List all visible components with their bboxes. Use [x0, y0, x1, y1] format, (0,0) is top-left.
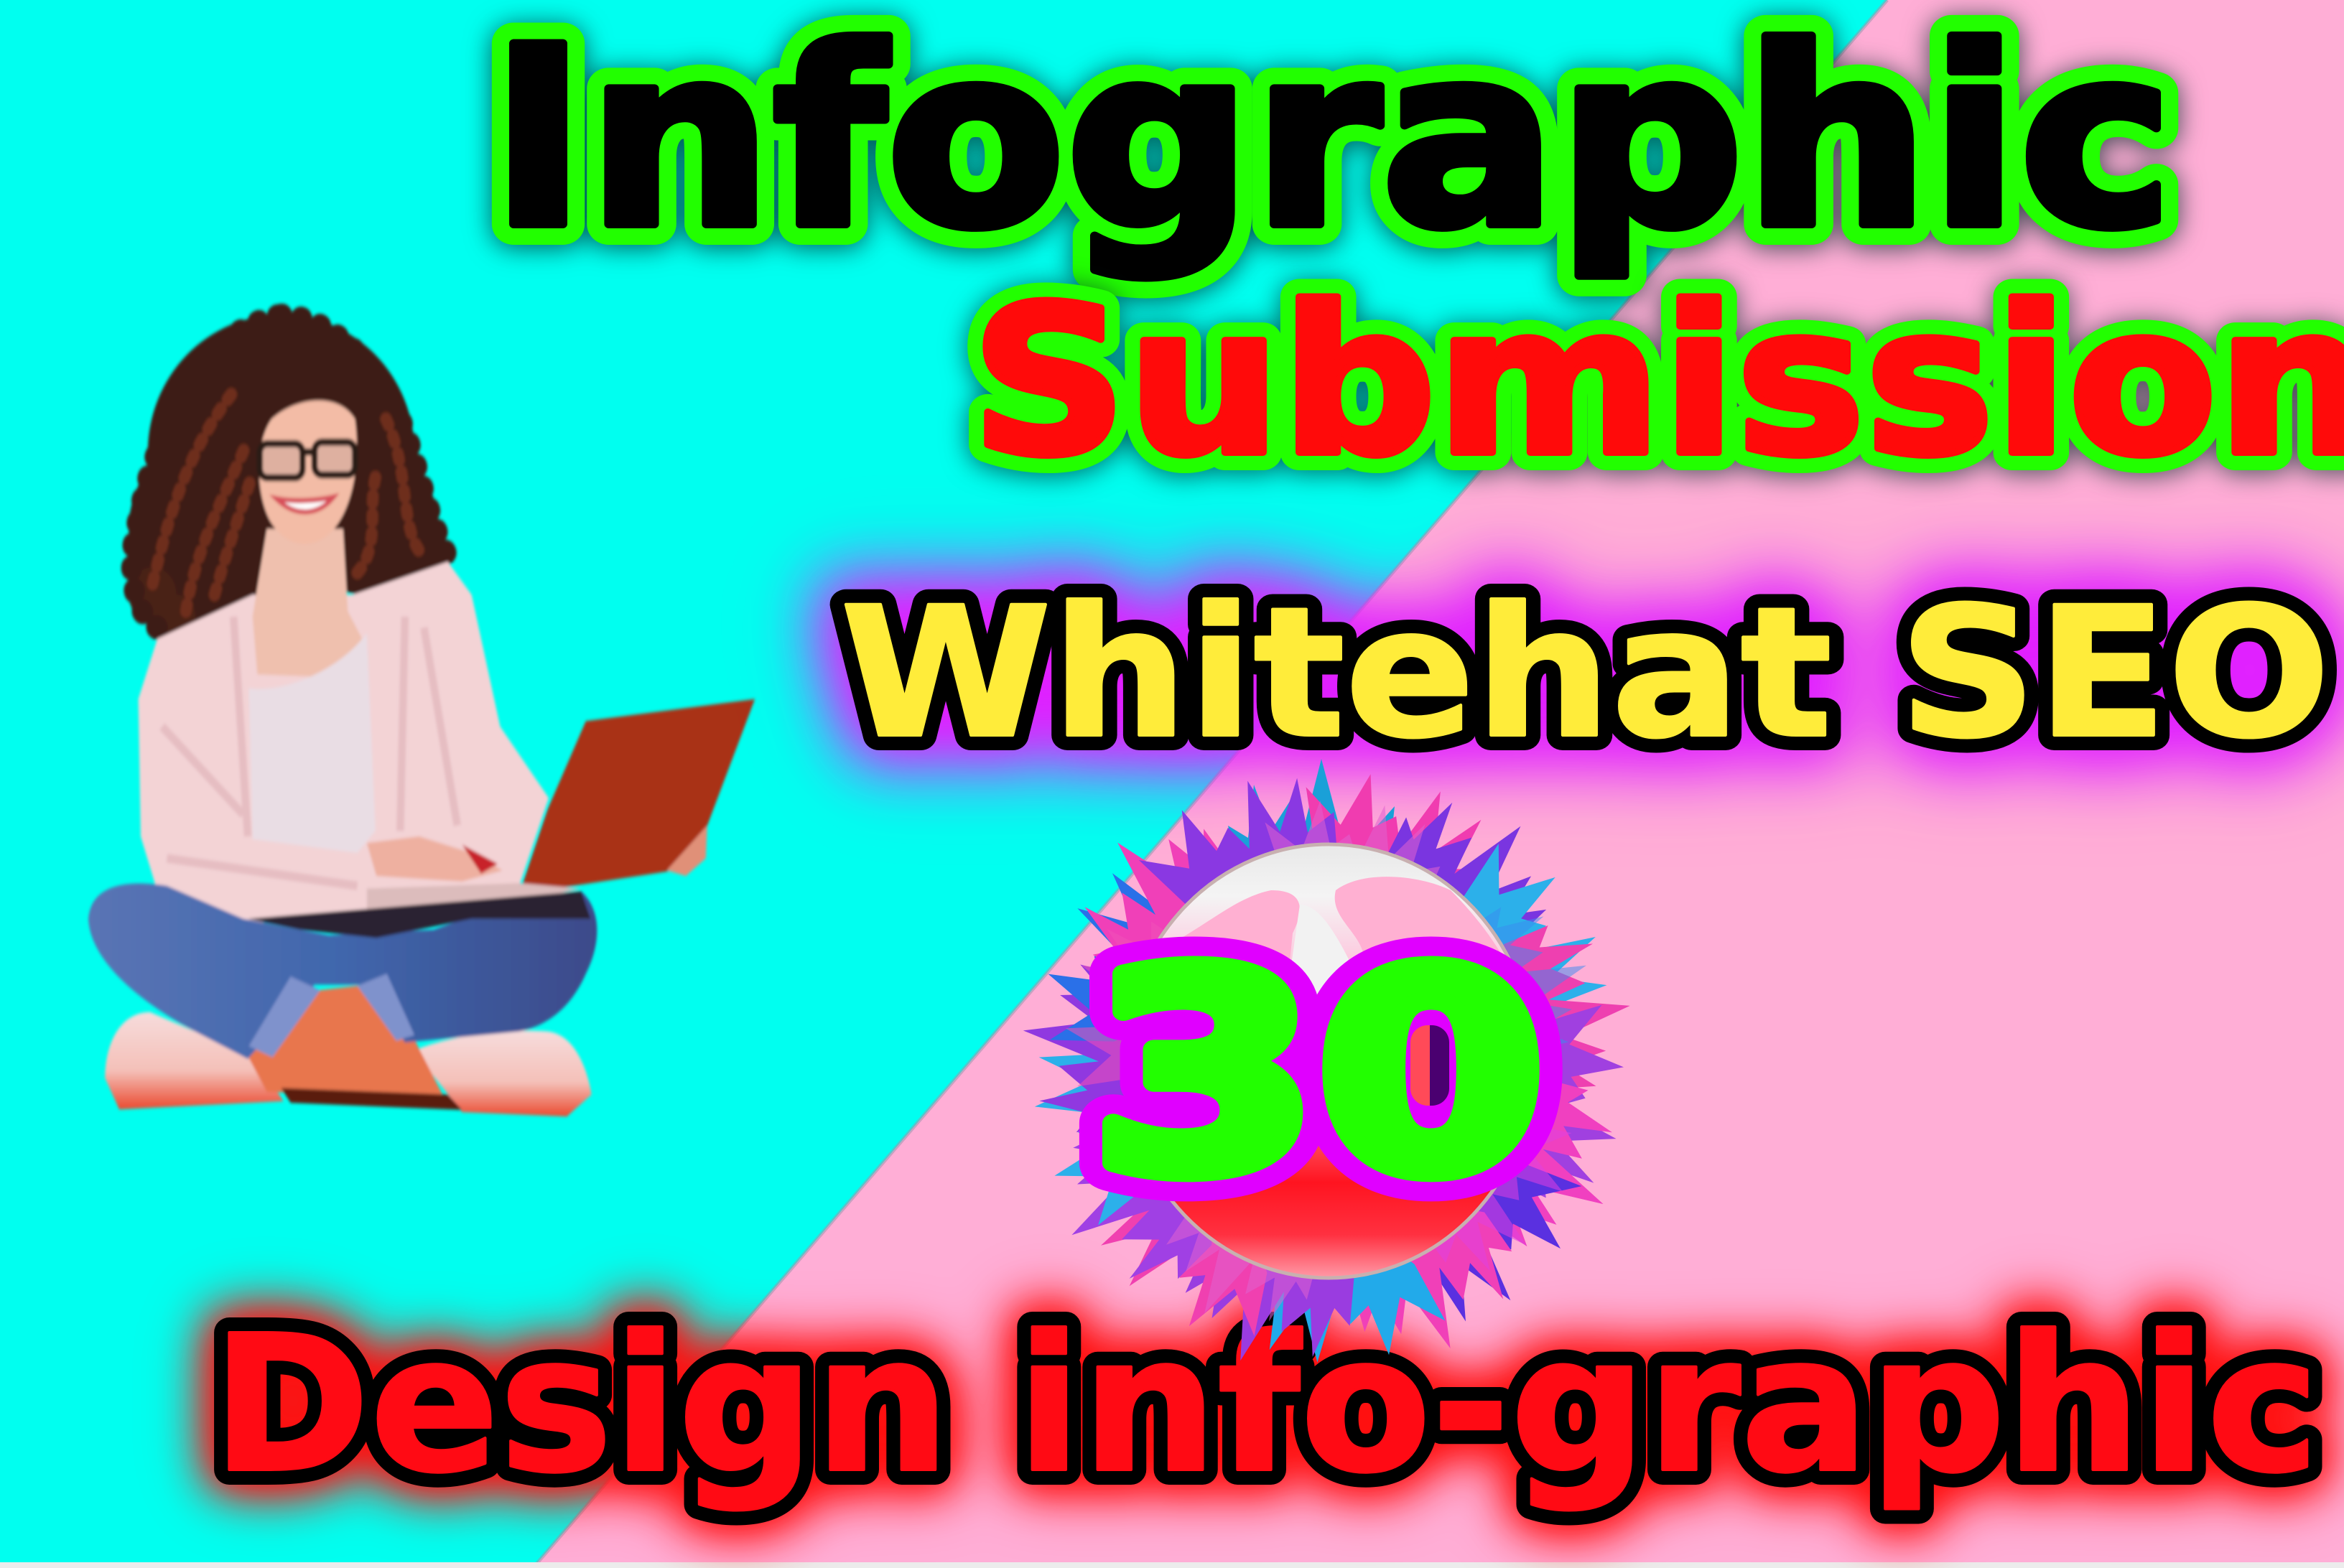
heading: Design info-graphic: Design info-graphic	[212, 1295, 2320, 1514]
glasses	[260, 442, 355, 477]
ankle	[248, 985, 445, 1100]
hair	[129, 312, 448, 639]
floor shadow	[282, 1088, 462, 1110]
title: Infographic: Infographic	[490, 0, 2174, 283]
jeans	[88, 884, 597, 1059]
icon: globe	[1124, 844, 1533, 1278]
tee shirt	[248, 633, 376, 853]
heading: Submission: Submission	[971, 263, 2344, 501]
heading: Submission: Submission	[971, 263, 2344, 501]
jacket	[139, 561, 549, 924]
hands	[367, 826, 707, 882]
right shoe	[414, 1031, 592, 1116]
heading: Design info-graphic: Design info-graphic	[212, 1295, 2320, 1514]
number badge: 30: 30	[1092, 915, 1544, 1234]
number badge: 30: 30	[1092, 915, 1544, 1234]
smile	[276, 497, 333, 512]
icon: paint splash behind globe	[1010, 752, 1647, 1389]
title: Infographic: Infographic	[490, 0, 2174, 283]
neck and chest	[253, 529, 362, 677]
illustration: woman sitting with laptop	[88, 312, 755, 1116]
heading: Whitehat SEO: Whitehat SEO	[840, 569, 2330, 778]
left shoe	[105, 1012, 284, 1109]
laptop	[367, 699, 755, 913]
heading: Whitehat SEO: Whitehat SEO	[840, 569, 2330, 778]
face	[259, 401, 357, 544]
